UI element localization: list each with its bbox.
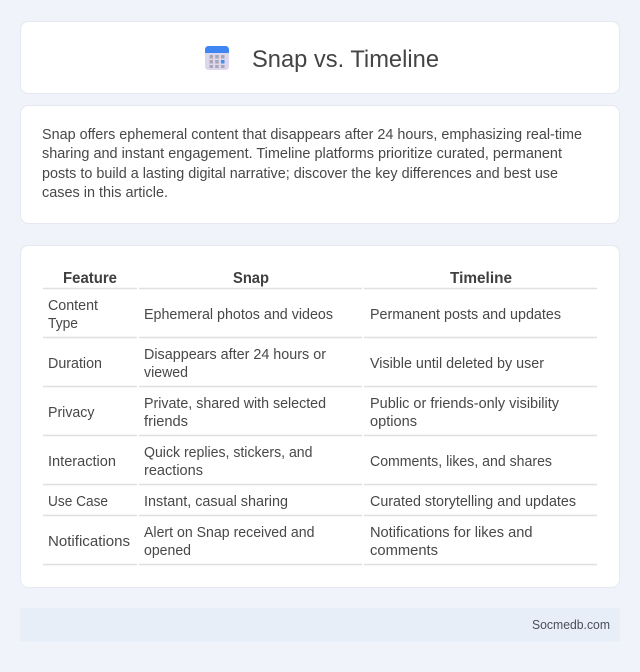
table header	[63, 270, 512, 287]
row: content type: Type	[48, 316, 78, 332]
row: duration: Duration	[48, 356, 102, 372]
row: use case	[48, 494, 576, 510]
icon: calendar	[205, 46, 229, 70]
row: duration	[48, 347, 544, 381]
row: interaction: Comments, likes, and shares	[370, 454, 552, 470]
row: interaction: Interaction	[48, 454, 116, 470]
text block: intro paragraph: sharing and instant engagement. Timeline platforms prioritize curated, permanent	[42, 146, 562, 162]
row: privacy: Private, shared with selected	[144, 396, 326, 412]
title: Snap vs. Timeline	[252, 46, 439, 73]
table header: Feature	[63, 270, 117, 287]
row: privacy	[48, 396, 560, 430]
row: interaction	[48, 445, 552, 479]
row: content type: Permanent posts and updates	[370, 307, 561, 323]
row: privacy: Privacy	[48, 405, 95, 421]
footer	[20, 608, 620, 642]
row: privacy: friends	[144, 414, 188, 430]
row: notifications: opened	[144, 543, 191, 559]
row: interaction: Quick replies, stickers, and	[144, 445, 312, 461]
row: notifications: comments	[370, 543, 438, 559]
row: notifications: Notifications	[48, 534, 130, 550]
text block: intro paragraph: Snap offers ephemeral content that disappears after 24 hours, emphasizing real-time	[42, 127, 582, 143]
row: use case: Instant, casual sharing	[144, 494, 288, 510]
row: duration: Disappears after 24 hours or	[144, 347, 326, 363]
text block: intro paragraph: cases in this article.	[42, 185, 168, 201]
row: content type: Ephemeral photos and videos	[144, 307, 333, 323]
row: duration: viewed	[144, 365, 188, 381]
row: content type	[48, 298, 561, 332]
text block: intro paragraph: posts to build a lasting digital narrative; discover the key differences and best use	[42, 166, 558, 182]
row: notifications	[48, 525, 532, 559]
row: content type: Content	[48, 298, 98, 314]
panel: comparison table	[20, 246, 620, 588]
row: use case: Use Case	[48, 494, 108, 510]
text block: intro paragraph	[42, 127, 582, 201]
row: use case: Curated storytelling and updates	[370, 494, 576, 510]
table header: Timeline	[450, 270, 512, 287]
row: privacy: Public or friends-only visibility	[370, 396, 560, 412]
panel: title card	[20, 22, 620, 94]
panel: intro	[20, 106, 620, 224]
row: notifications: Alert on Snap received and	[144, 525, 314, 541]
row: duration: Visible until deleted by user	[370, 356, 544, 372]
row: interaction: reactions	[144, 463, 203, 479]
table header: Snap	[233, 270, 269, 287]
row: privacy: options	[370, 414, 417, 430]
row: notifications: Notifications for likes and	[370, 525, 532, 541]
footer: Socmedb.com	[532, 618, 610, 632]
